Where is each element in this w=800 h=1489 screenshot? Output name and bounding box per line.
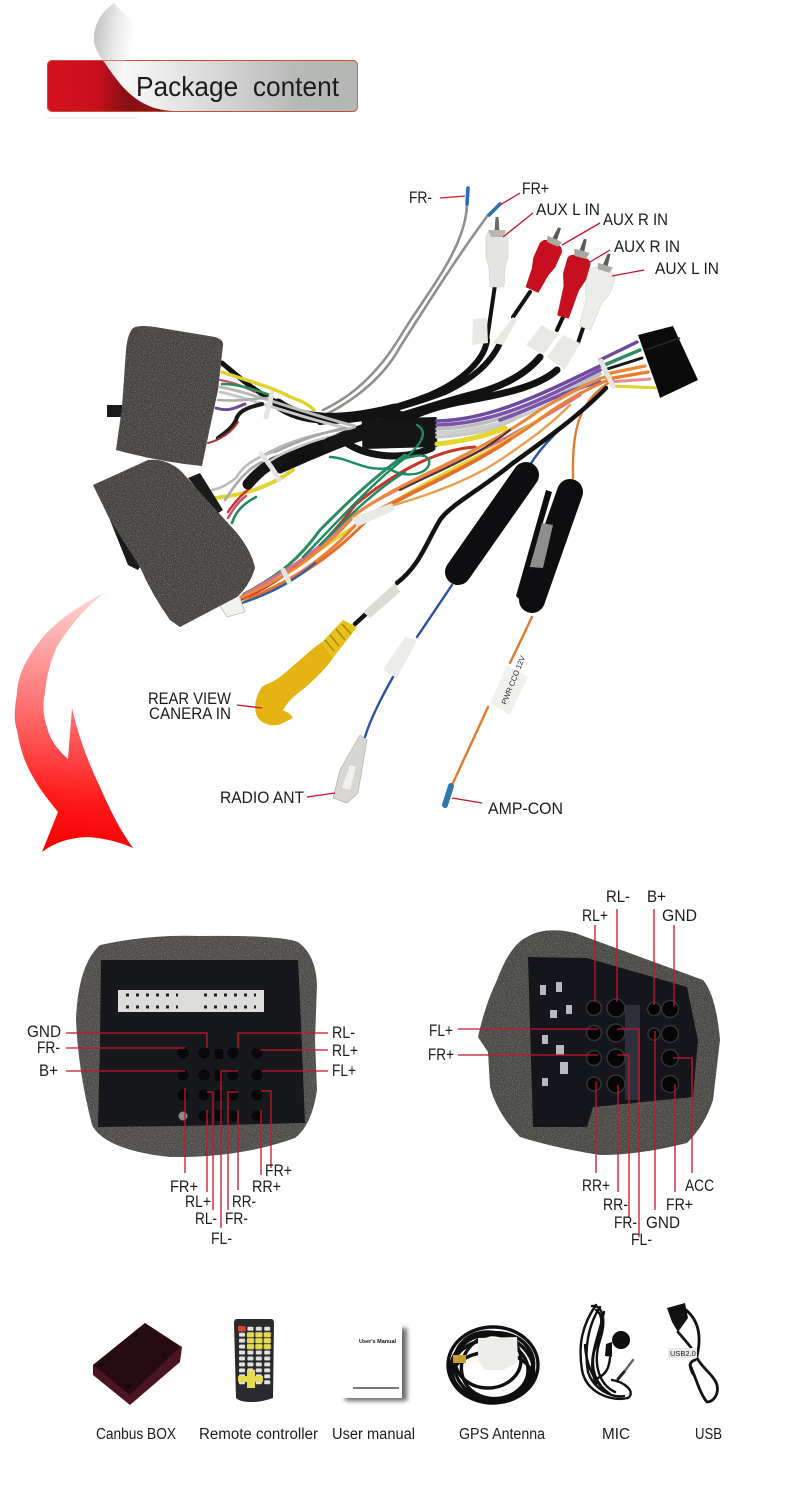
- label FR-: FR-: [225, 1210, 248, 1228]
- label FR+: FR+: [666, 1196, 693, 1214]
- label RL+: RL+: [332, 1042, 358, 1060]
- yellow video plug: [255, 620, 357, 725]
- label RR+: RR+: [582, 1177, 610, 1195]
- heading text: Package content: [136, 71, 339, 102]
- lower colour bundle: [240, 375, 610, 603]
- caption: GPS Antenna: [459, 1426, 545, 1443]
- label GND: GND: [646, 1214, 680, 1232]
- label RL-: RL-: [332, 1024, 355, 1042]
- label B+: B+: [647, 888, 666, 906]
- label RR-: RR-: [603, 1196, 628, 1214]
- blank socket: [178, 1112, 188, 1120]
- black RCA cables: [277, 285, 583, 470]
- harness callout labels: [148, 180, 719, 818]
- wires from upper foam: [208, 363, 355, 443]
- label AUX L IN lower: AUX L IN: [655, 260, 719, 278]
- wiring harness photo: [93, 188, 698, 805]
- right black connector: [638, 326, 698, 398]
- item: user manual: [332, 1324, 415, 1443]
- wires from lower foam: [212, 428, 355, 523]
- label amp-con: AMP-CON: [488, 800, 563, 818]
- item: GPS antenna: [444, 1324, 545, 1443]
- RCA wire labels: [352, 317, 580, 527]
- socket sheen: [625, 1005, 640, 1100]
- black inline filter right: [516, 490, 570, 600]
- pinout lines: [66, 1033, 328, 1228]
- RCA plug: white left: [486, 217, 508, 287]
- black housing: [528, 957, 698, 1127]
- blue radio wire: [365, 393, 600, 737]
- left connector pinout: [27, 936, 358, 1248]
- accessories row: [93, 1303, 722, 1443]
- gray FR wires: [323, 205, 488, 414]
- label AUX R IN top: AUX R IN: [603, 211, 668, 229]
- socket circles: [586, 999, 678, 1093]
- right connector pinout: [428, 888, 720, 1249]
- label FR-: FR-: [37, 1039, 60, 1057]
- caption: MIC: [602, 1426, 630, 1443]
- label FR-: FR-: [614, 1214, 637, 1232]
- orange amp wire: [453, 380, 613, 783]
- callout lines: [237, 193, 644, 803]
- main colour bundle to right connector: [437, 342, 660, 444]
- amp wire blue tip: [445, 786, 451, 805]
- radio wire tag: [383, 637, 417, 678]
- label RL-: RL-: [606, 888, 630, 906]
- label RR-: RR-: [232, 1193, 256, 1211]
- label canera in: CANERA IN: [149, 705, 231, 723]
- label RR+: RR+: [252, 1178, 281, 1196]
- label B+: B+: [39, 1062, 58, 1080]
- label RL+: RL+: [582, 907, 608, 925]
- item: microphone: [581, 1305, 633, 1443]
- RCA plug: white right: [573, 250, 621, 332]
- label AUX R IN lower: AUX R IN: [614, 238, 680, 256]
- caption: User manual: [332, 1426, 415, 1443]
- label FR+ right: FR+: [265, 1162, 292, 1180]
- caption: Canbus BOX: [96, 1426, 177, 1443]
- label FR+: FR+: [522, 180, 549, 198]
- RCA plug: red left: [521, 223, 571, 295]
- caption: Remote controller: [199, 1426, 318, 1443]
- radio antenna plug: [333, 735, 367, 803]
- dark taped trunk: [330, 430, 437, 456]
- white cable ties: [261, 361, 613, 582]
- item: canbus box: [93, 1323, 182, 1443]
- foam surround: [478, 930, 720, 1155]
- caption: USB: [695, 1426, 722, 1443]
- socket grid: [178, 1048, 262, 1122]
- label FL+: FL+: [332, 1062, 356, 1080]
- foam block upper: [116, 326, 223, 466]
- label radio ant: RADIO ANT: [220, 789, 304, 807]
- big red curved arrow: [15, 593, 133, 852]
- black housing: [98, 960, 305, 1127]
- FR wire blue tips: [467, 188, 500, 215]
- white pin block: [118, 990, 264, 1012]
- cable tag text: USB2.0: [670, 1349, 696, 1358]
- label FR-: FR-: [409, 189, 432, 207]
- pinout lines: [458, 909, 692, 1237]
- RCA plug: red right: [551, 236, 597, 320]
- item: remote controller: [199, 1319, 318, 1443]
- green wire loops: [303, 425, 429, 557]
- item: USB cable: [667, 1303, 722, 1443]
- label FR+: FR+: [428, 1046, 454, 1064]
- manual cover title: User's Manual: [359, 1339, 397, 1345]
- black camera wire: [355, 388, 606, 624]
- amp wire tag: [490, 665, 528, 715]
- amp wire tag text: PWR CCO 12V: [500, 654, 527, 706]
- white JST plug: [218, 593, 245, 617]
- label FL-: FL-: [631, 1231, 652, 1249]
- foam block lower: [93, 460, 255, 627]
- heading banner: Package content: [47, 3, 358, 118]
- foam surround: [76, 936, 317, 1157]
- black inline filter left: [458, 475, 526, 572]
- left pin block highlights: [540, 982, 572, 1086]
- label FR+ left: FR+: [170, 1178, 198, 1196]
- label FL-: FL-: [211, 1230, 232, 1248]
- label RL+: RL+: [185, 1193, 211, 1211]
- label AUX L IN top: AUX L IN: [536, 201, 600, 219]
- label FL+: FL+: [429, 1022, 453, 1040]
- label GND: GND: [662, 907, 697, 925]
- label RL-: RL-: [195, 1210, 217, 1228]
- filter silver sticker: [530, 523, 553, 568]
- camera wire tag: [363, 583, 400, 618]
- label rear view: REAR VIEW: [148, 690, 231, 708]
- label GND: GND: [27, 1023, 61, 1041]
- black tab and plug under foam: [107, 405, 223, 570]
- label ACC: ACC: [685, 1177, 714, 1195]
